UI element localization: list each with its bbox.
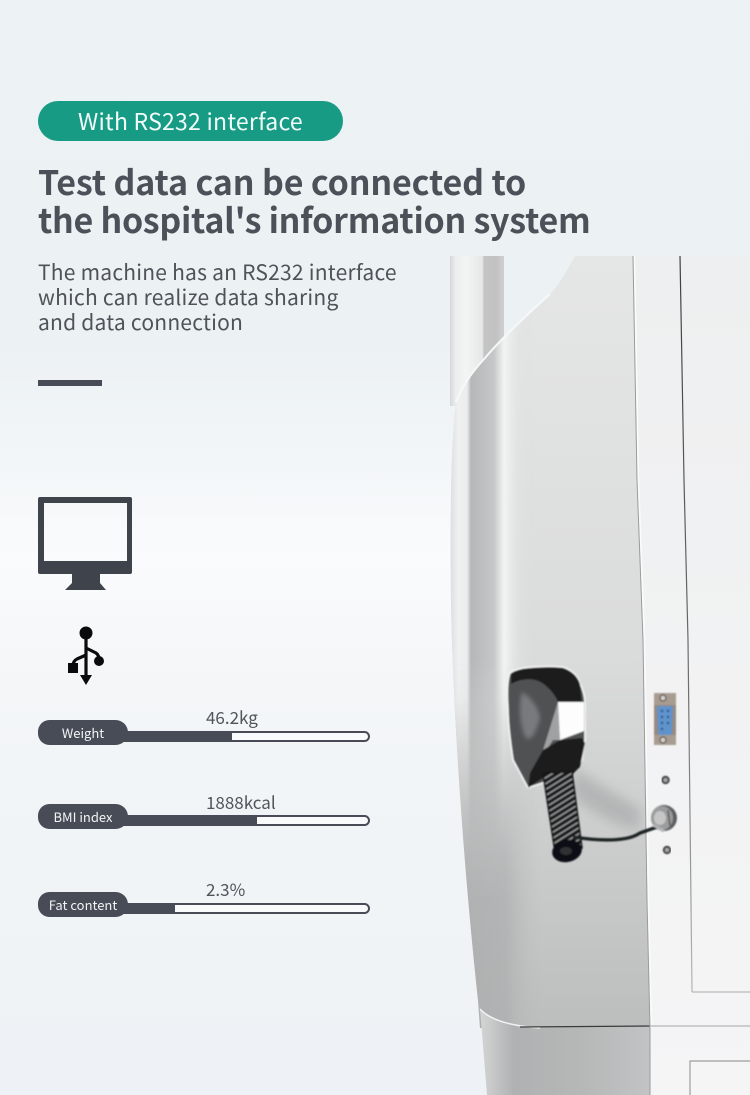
label pill <box>38 804 128 829</box>
base shell <box>480 1009 650 1095</box>
label pill: Weight <box>62 723 104 742</box>
handle recess <box>507 666 640 830</box>
heading: the hospital's information system <box>38 194 590 243</box>
icon: USB <box>68 626 104 685</box>
machine photo illustration <box>450 256 750 1095</box>
heading: Test data can be connected to <box>38 156 526 205</box>
pole <box>450 256 504 406</box>
heading <box>38 156 590 243</box>
label pill: BMI index <box>54 807 112 826</box>
DB9 serial port <box>654 693 676 745</box>
cabinet white side panel <box>633 256 692 1095</box>
track <box>118 903 370 914</box>
value: 2.3%: 2.3% <box>206 876 245 901</box>
round cable connector <box>651 805 677 831</box>
badge: RS232 interface: With RS232 interface <box>78 103 303 137</box>
short divider bar <box>38 380 102 386</box>
value: 1888kcal: 1888kcal <box>206 789 276 814</box>
label pill <box>38 892 128 917</box>
track <box>118 815 370 826</box>
track <box>118 731 370 742</box>
metric: Weight <box>38 720 370 745</box>
metric: Fat content <box>38 892 370 917</box>
cabinet door <box>650 256 750 1095</box>
icon: monitor <box>38 497 132 590</box>
description text: which can realize data sharing <box>38 282 339 312</box>
body shell <box>451 256 650 1028</box>
description text: and data connection <box>38 307 243 337</box>
metric: BMI index <box>38 804 370 829</box>
badge: RS232 interface <box>38 101 343 141</box>
description text: The machine has an RS232 interface <box>38 257 397 287</box>
label pill <box>38 720 128 745</box>
connector screws <box>662 777 670 853</box>
description text <box>38 257 397 337</box>
coiled cable <box>543 772 657 865</box>
value: 46.2kg: 46.2kg <box>206 704 258 729</box>
label pill: Fat content <box>49 895 117 914</box>
